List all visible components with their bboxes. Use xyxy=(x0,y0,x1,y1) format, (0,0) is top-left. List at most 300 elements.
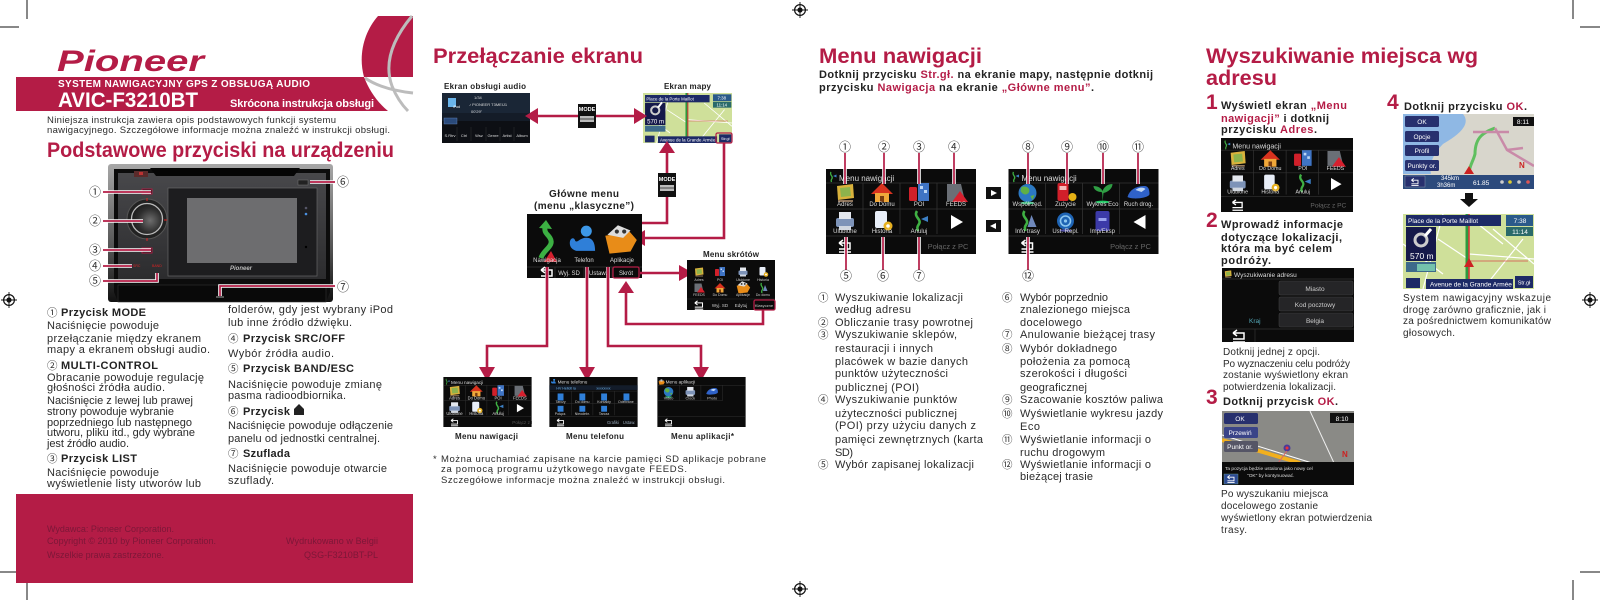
screen: phone menu: Tarcza xyxy=(599,412,609,416)
list column 1: użyteczności publicznej xyxy=(835,408,957,420)
footnote: Można uruchamiać zapisane na karcie pamięci SD aplikacje pobrane xyxy=(441,454,766,465)
registration mark bottom xyxy=(792,581,808,597)
banner xyxy=(16,77,388,112)
screen: shortcut menu: Wyj. SD xyxy=(712,303,729,308)
buttons description column 1: Naciśnięcie powoduje xyxy=(47,320,159,332)
callouts on navigation menu: ⑨ xyxy=(1061,138,1073,155)
list column 1: ① xyxy=(818,290,829,305)
screen: phone menu: HV Hellotl ia xyxy=(556,386,576,390)
screen: phone menu: Ustaw. xyxy=(623,420,635,425)
step 1 text: Wyświetl ekran „Menu xyxy=(1221,100,1347,112)
screen: audio: S.Rtrv xyxy=(444,133,456,138)
screen: route confirmation: "OK" by kontynuować. xyxy=(1247,473,1294,479)
screen: shortcut menu: Edytuj xyxy=(735,303,747,308)
list column 1: ⑤ xyxy=(818,457,829,472)
buttons description column 1: Naciśnięcie z lewej lub prawej xyxy=(47,395,193,407)
screen: applications menu: Video xyxy=(664,396,673,400)
label: map screen: Ekran mapy xyxy=(664,82,712,91)
label: audio screen: Ekran obsługi audio xyxy=(444,82,526,91)
buttons description column 2: Przycisk BAND/ESC xyxy=(243,363,354,375)
screen: step 1 navigation menu: Do Domu xyxy=(1259,166,1282,172)
callouts on device: ② xyxy=(89,212,101,229)
highlight and arrow: classic button back to main menu xyxy=(618,281,775,324)
screen: shortcut menu xyxy=(687,260,775,310)
buttons description column 2: Naciśnięcie powoduje zmianę xyxy=(228,379,382,391)
footnote xyxy=(433,454,766,486)
step 1 text: 1 xyxy=(1206,91,1218,114)
label: main menu xyxy=(534,189,634,212)
buttons description column 1: ③ xyxy=(47,451,58,466)
screen: address search: Belgia xyxy=(1306,318,1324,325)
screen: applications menu xyxy=(657,377,746,427)
screen: route confirmation: 8:10 xyxy=(1336,416,1349,423)
instruction: przycisku Nawigacja na ekranie „Główne menu”. xyxy=(819,82,1094,94)
screen: map: Str.gł xyxy=(721,137,730,141)
screen: step 1 navigation menu: Menu nawigacji xyxy=(1232,143,1281,150)
screen: step 1 navigation menu: Ulubione xyxy=(1227,190,1248,196)
screen: route guidance map xyxy=(1403,214,1534,289)
screen: main menu xyxy=(527,214,642,278)
list column 1: restauracji i innych xyxy=(835,343,933,355)
screen: route overview: 8:11 xyxy=(1517,119,1529,126)
list column 1: pamięci zewnętrznych (karta xyxy=(835,434,984,446)
screen: audio: Genre xyxy=(487,133,499,138)
labels: submenus: Menu nawigacji xyxy=(455,432,518,441)
footnote: * xyxy=(433,454,437,465)
intro text: Niniejsza instrukcja zawiera opis podstawowych funkcji systemu xyxy=(47,115,336,126)
screen: shortcut menu: Adres xyxy=(694,278,704,282)
buttons description column 2: Wybór źródła audio. xyxy=(228,348,334,360)
list column 1: publicznej (POI) xyxy=(835,382,919,394)
screen: navigation menu page 2: Menu nawigacji xyxy=(1022,174,1077,183)
step 2 note: potwierdzenia lokalizacji. xyxy=(1223,382,1336,393)
step 2 text xyxy=(1206,209,1343,267)
callouts on navigation menu xyxy=(839,138,1144,284)
screen: main menu: Nawigacja xyxy=(533,258,561,264)
arrow: main menu to map via MODE xyxy=(638,141,676,223)
list column 2: Eco xyxy=(1020,421,1040,433)
panel: address search xyxy=(1206,45,1552,536)
buttons description column 2: panelu od jednostki centralnej. xyxy=(228,433,380,445)
screen: step 1 navigation menu: Anuluj xyxy=(1295,190,1310,196)
screen: navigation menu page 1: Połącz z PC xyxy=(928,242,969,251)
registration mark right xyxy=(1582,292,1598,308)
screen: navigation menu page 1: POI xyxy=(914,202,924,208)
screen: shortcut menu: Historia xyxy=(757,278,769,282)
list column 1: ③ xyxy=(818,327,829,342)
intro text: nawigacyjnego. Szczegółowe informacje można znaleźć w instrukcji obsługi. xyxy=(47,125,390,136)
arrow: main menu to map via MODE: MODE xyxy=(659,177,676,183)
screen: navigation menu page 1: Ulubione xyxy=(833,229,858,235)
list column 1: ② xyxy=(818,315,829,330)
buttons description column 2: Przycisk SRC/OFF xyxy=(243,333,345,345)
buttons description column 1: Naciśnięcie powoduje xyxy=(47,467,159,479)
screen: route confirmation: Przewiń xyxy=(1228,430,1252,437)
screen: navigation menu small xyxy=(443,377,538,427)
screen: main menu: Skrót xyxy=(619,271,633,277)
intro text xyxy=(47,115,390,136)
labels: submenus xyxy=(455,432,735,441)
screen: route overview: 61.85 xyxy=(1473,180,1490,187)
page arrows xyxy=(986,187,1001,232)
footnote: za pomocą programu użytkowego navgate FEEDS. xyxy=(441,464,687,475)
screen: route overview: N xyxy=(1519,161,1525,170)
list column 2: ⑩ xyxy=(1002,406,1013,421)
list column 2: Wybór dokładnego xyxy=(1020,343,1117,355)
screen: navigation menu page 2: Imp/Eksp xyxy=(1090,229,1116,235)
buttons description column 1: Przycisk MODE xyxy=(61,307,146,319)
footer band: Wydrukowano w Belgii xyxy=(286,536,378,546)
screen: navigation menu small: POI xyxy=(495,395,502,400)
screen: shortcut menu: Do Domu xyxy=(713,293,727,297)
banner: AVIC-F3210BT xyxy=(58,89,198,112)
panel: cover xyxy=(16,16,413,583)
screen: step 1 navigation menu: Połącz z PC xyxy=(1310,203,1347,210)
list column 2: Wyświetlanie informacji o xyxy=(1020,459,1151,471)
screen: navigation menu page 2: Ust. Repl. xyxy=(1052,229,1079,235)
screen: audio: 00'29" xyxy=(471,109,483,114)
step 3 note: Po wyszukaniu miejsca xyxy=(1221,489,1328,500)
list column 2: szerokości i długości xyxy=(1020,368,1127,380)
screen: navigation menu page 1: Anuluj xyxy=(911,229,927,235)
screen: navigation menu page 2: Połącz z PC xyxy=(1110,242,1152,251)
step 2 note: Dotknij jednej z opcji. xyxy=(1223,347,1320,358)
buttons description column 1 xyxy=(46,305,210,490)
screen: map xyxy=(643,93,732,143)
screen: map: Place de la Porte Maillot xyxy=(646,96,695,101)
list column 2: ⑥ xyxy=(1002,290,1013,305)
list column 2: znalezionego miejsca xyxy=(1020,304,1131,316)
screen: navigation menu page 2 xyxy=(1008,169,1158,254)
screen: address search xyxy=(1222,268,1354,342)
screen: address search: Miasto xyxy=(1305,286,1325,293)
screen: navigation menu small: Menu nawigacji xyxy=(451,380,483,385)
list column 2: Wybór poprzednio xyxy=(1020,292,1108,304)
buttons description column 1: przełączanie między ekranem xyxy=(47,333,201,345)
screen: step 1 navigation menu xyxy=(1221,138,1353,212)
screen: phone menu: Tarczy xyxy=(555,400,566,404)
highlight: shortcut button xyxy=(613,267,639,278)
screen: main menu: Wyj. SD xyxy=(558,271,580,277)
registration mark top xyxy=(792,2,808,18)
screen: phone menu: Grafiki xyxy=(607,420,619,425)
screen: map: Avenue de la Grande Armée xyxy=(660,137,716,142)
screen: phone menu: Nieodebr. xyxy=(575,412,590,416)
screen: phone menu: Odebrane xyxy=(618,400,634,404)
screen: navigation menu page 2: Współrzęd. xyxy=(1012,202,1043,208)
labels: submenus: Menu telefonu xyxy=(566,432,624,441)
step 1 text: przycisku Adres. xyxy=(1221,124,1317,136)
list column 1: Wyszukiwanie punktów xyxy=(835,394,957,406)
step 3 note xyxy=(1220,489,1372,536)
step 3 note: wyświetlony ekran potwierdzenia xyxy=(1220,513,1372,524)
callouts on device: ① xyxy=(89,183,101,200)
screen: shortcut menu: FEEDS xyxy=(693,293,705,297)
step 4 text xyxy=(1387,91,1527,114)
screen: navigation menu small: Historia xyxy=(469,411,484,416)
buttons description column 1: MULTI-CONTROL xyxy=(61,360,158,372)
list column 1: Wybór zapisanej lokalizacji xyxy=(835,459,974,471)
screen: navigation menu page 1: FEEDS xyxy=(946,202,966,208)
footer band: QSG-F3210BT-PL xyxy=(304,550,378,560)
footer band xyxy=(16,494,413,583)
buttons description column 1: wyświetlenie listy utworów lub xyxy=(46,478,201,490)
step 4 note: System nawigacyjny wskazuje xyxy=(1403,293,1551,304)
screen: route overview: 3h36m xyxy=(1437,183,1455,189)
list column 1: Wyszukiwanie sklepów, xyxy=(835,329,957,341)
buttons description column 1: ① xyxy=(47,305,58,320)
screen: navigation menu small: Anuluj xyxy=(492,411,504,416)
screen: shortcut menu: Do domu xyxy=(756,293,770,297)
buttons description column 1: ② xyxy=(47,358,58,373)
screen: address search: Kod pocztowy xyxy=(1295,302,1336,309)
buttons description column 2: ⑦ xyxy=(228,446,239,461)
buttons description column 1: strony powoduje wybranie xyxy=(47,406,174,418)
buttons description column 2: lub inne źródło dźwięku. xyxy=(228,317,352,329)
heading: Podstawowe przyciski na urządzeniu xyxy=(47,139,394,162)
list column 2: geograficznej xyxy=(1020,382,1087,394)
highlight: map shortcut and arrow to main menu xyxy=(632,133,732,246)
screen: audio: 1/34 xyxy=(474,95,483,100)
instruction: Dotknij przycisku Str.gł. na ekranie mapy, następnie dotknij xyxy=(819,69,1153,81)
screen: audio: Artist xyxy=(502,133,512,138)
arrow: audio to map via MODE: MODE xyxy=(579,107,596,113)
step 2 text: Wprowadź informacje xyxy=(1221,219,1343,231)
step 3 text xyxy=(1206,386,1338,409)
callouts on navigation menu: ③ xyxy=(913,138,925,155)
buttons description column 2: Przycisk xyxy=(243,406,291,418)
buttons description column 2: ④ xyxy=(228,331,239,346)
step 3 note: trasy. xyxy=(1221,525,1247,536)
screen: route confirmation: Punkt or. xyxy=(1227,444,1253,451)
buttons description column 2: ⑤ xyxy=(228,361,239,376)
screen: navigation menu page 1 xyxy=(826,169,976,254)
buttons description column 1: poprzedniego lub następnego xyxy=(47,417,192,429)
list column 2 xyxy=(1002,290,1164,483)
screen: step 1 navigation menu: POI xyxy=(1298,166,1307,172)
screen: navigation menu page 2: Info trasy xyxy=(1015,229,1040,235)
registration mark left xyxy=(1,292,17,308)
step 4 note: za pośrednictwem komunikatów xyxy=(1403,316,1552,327)
heading: Wyszukiwanie miejsca wg xyxy=(1206,45,1478,68)
step 2 text: podróży. xyxy=(1221,255,1271,267)
screen: navigation menu page 2: Wykres Eco xyxy=(1087,202,1119,208)
step 3 note: docelowego zostanie xyxy=(1221,501,1318,512)
list column 2: Szacowanie kosztów paliwa xyxy=(1020,394,1164,406)
screen: step 1 navigation menu: FEEDS xyxy=(1327,166,1345,172)
screen: main menu: Telefon xyxy=(574,258,594,264)
screen: step 1 navigation menu: Adres xyxy=(1231,166,1245,172)
step 1 text xyxy=(1206,91,1347,136)
label: main menu: (menu „klasyczne”) xyxy=(534,201,634,212)
arrow: audio to map via MODE xyxy=(525,104,647,128)
screen: route guidance map: Place de la Porte Maillot xyxy=(1408,218,1478,225)
list column 2: Anulowanie bieżącej trasy xyxy=(1020,329,1156,341)
screen: route confirmation: N xyxy=(1342,450,1348,459)
callouts on navigation menu: ⑩ xyxy=(1097,138,1109,155)
screen: phone menu: Połącz. xyxy=(555,412,566,416)
labels: submenus: Menu aplikacji* xyxy=(671,432,735,441)
list column 1: Wyszukiwanie lokalizacji xyxy=(835,292,963,304)
heading: adresu xyxy=(1206,67,1277,90)
callouts on device: ⑥ xyxy=(337,173,349,190)
callouts on device: ⑤ xyxy=(89,272,101,289)
icon: down arrow xyxy=(1460,193,1478,207)
screen: navigation menu page 1: Historia xyxy=(872,229,893,235)
screen: applications menu: Clock xyxy=(686,396,695,400)
instruction xyxy=(819,69,1153,94)
callouts on device xyxy=(89,173,349,296)
screen: route overview xyxy=(1403,114,1534,189)
list column 2: Wyświetlanie wykresu jazdy xyxy=(1020,408,1164,420)
screen: route overview: Opcje xyxy=(1414,134,1431,141)
screen: shortcut menu: Klasyczne xyxy=(755,303,774,308)
list column 1: punktów użyteczności xyxy=(835,368,948,380)
callouts on navigation menu: ⑪ xyxy=(1132,138,1144,155)
screen: audio: Album xyxy=(516,133,528,138)
screen: phone menu xyxy=(549,377,638,427)
callouts on navigation menu: ⑥ xyxy=(877,267,889,284)
callouts on navigation menu: ⑫ xyxy=(1022,267,1034,284)
screen: navigation menu page 1: Menu nawigacji xyxy=(839,174,894,183)
list column 1: ④ xyxy=(818,392,829,407)
list column 1: Obliczanie trasy powrotnej xyxy=(835,317,973,329)
buttons description column 2: szuflady. xyxy=(228,475,274,487)
screen: audio xyxy=(442,93,530,143)
screen: route confirmation xyxy=(1222,411,1354,485)
list column 2: ⑧ xyxy=(1002,341,1013,356)
screen: navigation menu page 2: Ruch drog. xyxy=(1124,202,1154,208)
screen: main menu: Ustaw. xyxy=(589,271,607,277)
screen: route guidance map: 11:14 xyxy=(1512,229,1528,236)
banner: Skrócona instrukcja obsługi xyxy=(230,98,374,110)
list column 1: według adresu xyxy=(834,304,911,316)
buttons description column 1: głośności źródła audio. xyxy=(47,382,165,394)
step 3 text: 3 xyxy=(1206,386,1218,409)
list column 2: ⑪ xyxy=(1002,432,1013,447)
list column 2: położenia za pomocą xyxy=(1020,356,1131,368)
screen: navigation menu small: FEEDS xyxy=(513,395,527,400)
buttons description column 2: folderów, gdy jest wybrany iPod xyxy=(228,304,393,316)
screen: audio: Ctrl xyxy=(461,133,467,138)
callouts on navigation menu: ⑤ xyxy=(840,267,852,284)
screen: route overview: Profil xyxy=(1415,148,1430,155)
step 4 note: głosowych. xyxy=(1403,328,1455,339)
buttons description column 2: Szuflada xyxy=(243,448,291,460)
buttons description column 2 xyxy=(228,304,393,487)
list column 1: SD) xyxy=(835,447,853,459)
screen: phone menu: Kontakty xyxy=(597,400,611,404)
screen: applications menu: Photo xyxy=(707,396,717,400)
step 4 note xyxy=(1403,293,1552,339)
panel: navigation menu xyxy=(818,45,1164,483)
screen: shortcut menu: Ulubione xyxy=(736,278,750,282)
footnote: Szczegółowe informacje można znaleźć w instrukcji obsługi. xyxy=(441,475,725,486)
list column 2: docelowego xyxy=(1020,317,1082,329)
callouts on navigation menu: ① xyxy=(839,138,851,155)
list column 2: ⑫ xyxy=(1002,457,1013,472)
callouts on navigation menu: ⑦ xyxy=(913,267,925,284)
screen: main menu: Aplikacje xyxy=(610,258,635,264)
screen: navigation menu small: Do Domu xyxy=(468,395,486,400)
step 4 note: drogę zarówno graficznie, jak i xyxy=(1403,305,1546,316)
callouts on navigation menu: ⑧ xyxy=(1022,138,1034,155)
screen: route overview: OK xyxy=(1417,119,1427,126)
screen: navigation menu page 1: Adres xyxy=(837,202,853,208)
screen: route guidance map: 570 m xyxy=(1410,251,1434,261)
buttons description column 1: utworu, pliku itd., gdy wybrane xyxy=(47,427,195,439)
screen: navigation menu small: Ulubione xyxy=(446,411,463,416)
screen: step 1 navigation menu: Historia xyxy=(1261,190,1279,196)
device illustration xyxy=(108,164,333,302)
buttons description column 1: mapy a ekranem obsługi audio. xyxy=(47,344,210,356)
callouts on device: ④ xyxy=(89,257,101,274)
screen: map: 570 m xyxy=(647,120,664,126)
list column 1: (POI) przy użyciu danych z xyxy=(835,420,976,432)
buttons description column 1: Obracanie powoduje regulację xyxy=(47,372,204,384)
corner graphic xyxy=(362,16,413,111)
list column 2: Wyświetlanie informacji o xyxy=(1020,434,1151,446)
footer band: Wszelkie prawa zastrzeżone. xyxy=(47,550,164,560)
list column 2: ⑦ xyxy=(1002,327,1013,342)
device illustration: Pioneer xyxy=(230,266,253,272)
step 4 text: 4 xyxy=(1387,91,1399,114)
screen: route overview: 345km xyxy=(1441,176,1459,182)
buttons description column 2: Naciśnięcie powoduje odłączenie xyxy=(228,420,393,432)
step 3 text: Dotknij przycisk OK. xyxy=(1223,396,1338,408)
screen: applications menu: Menu aplikacji xyxy=(666,379,695,384)
screen: route overview: Punkty or. xyxy=(1408,163,1437,170)
screen: navigation menu small: Adres xyxy=(449,395,460,400)
footer band: Copyright © 2010 by Pioneer Corporation. xyxy=(47,536,216,546)
screen: shortcut menu: POI xyxy=(717,278,723,282)
screen: address search: Wyszukiwanie adresu xyxy=(1234,272,1297,279)
device illustration: SRC xyxy=(133,264,141,268)
label: main menu: Główne menu xyxy=(549,189,619,200)
step 2 text: która ma być celem xyxy=(1221,243,1332,255)
screen: audio: ♪ PIONEER T3MEIJ1 xyxy=(469,102,508,107)
buttons description column 1: jest źródło audio. xyxy=(46,438,129,450)
step 4 text: Dotknij przycisku OK. xyxy=(1404,101,1527,113)
screen: route confirmation: Ta pozycja będzie ustalona jako nowy cel xyxy=(1225,466,1313,472)
list column 2: bieżącej trasie xyxy=(1020,471,1093,483)
screen: route guidance map: 7:38 xyxy=(1514,218,1527,225)
step 2 note xyxy=(1223,347,1350,393)
screen: navigation menu small: Połącz z PC xyxy=(512,420,538,425)
screen: shortcut menu: Aplikacje xyxy=(736,293,750,297)
screen: navigation menu page 2: Zużycie xyxy=(1055,202,1076,208)
step 2 text: 2 xyxy=(1206,209,1218,232)
screen: map: 11:14 xyxy=(716,102,728,107)
step 1 text: nawigacji” i dotknij xyxy=(1221,113,1329,125)
arrow: to shortcut menu xyxy=(640,265,693,281)
heading xyxy=(1206,45,1478,90)
buttons description column 1: Przycisk LIST xyxy=(61,453,137,465)
callouts on device: ⑦ xyxy=(337,278,349,295)
step 2 note: Po wyznaczeniu celu podróży xyxy=(1223,359,1350,370)
list column 2: ruchu drogowym xyxy=(1020,447,1105,459)
banner: SYSTEM NAWIGACYJNY GPS Z OBSŁUGĄ AUDIO xyxy=(58,79,310,90)
screen: audio: Wsz xyxy=(475,133,483,138)
label: shortcut menu: Menu skrótów xyxy=(703,250,760,259)
step 2 text: dotyczące lokalizacji, xyxy=(1221,232,1342,244)
buttons description column 2: ⑥ xyxy=(228,404,239,419)
device illustration: BAND xyxy=(152,264,162,268)
callouts on device: ③ xyxy=(89,241,101,258)
list column 1 xyxy=(818,290,984,472)
callouts on navigation menu: ④ xyxy=(948,138,960,155)
callouts on navigation menu: ② xyxy=(878,138,890,155)
